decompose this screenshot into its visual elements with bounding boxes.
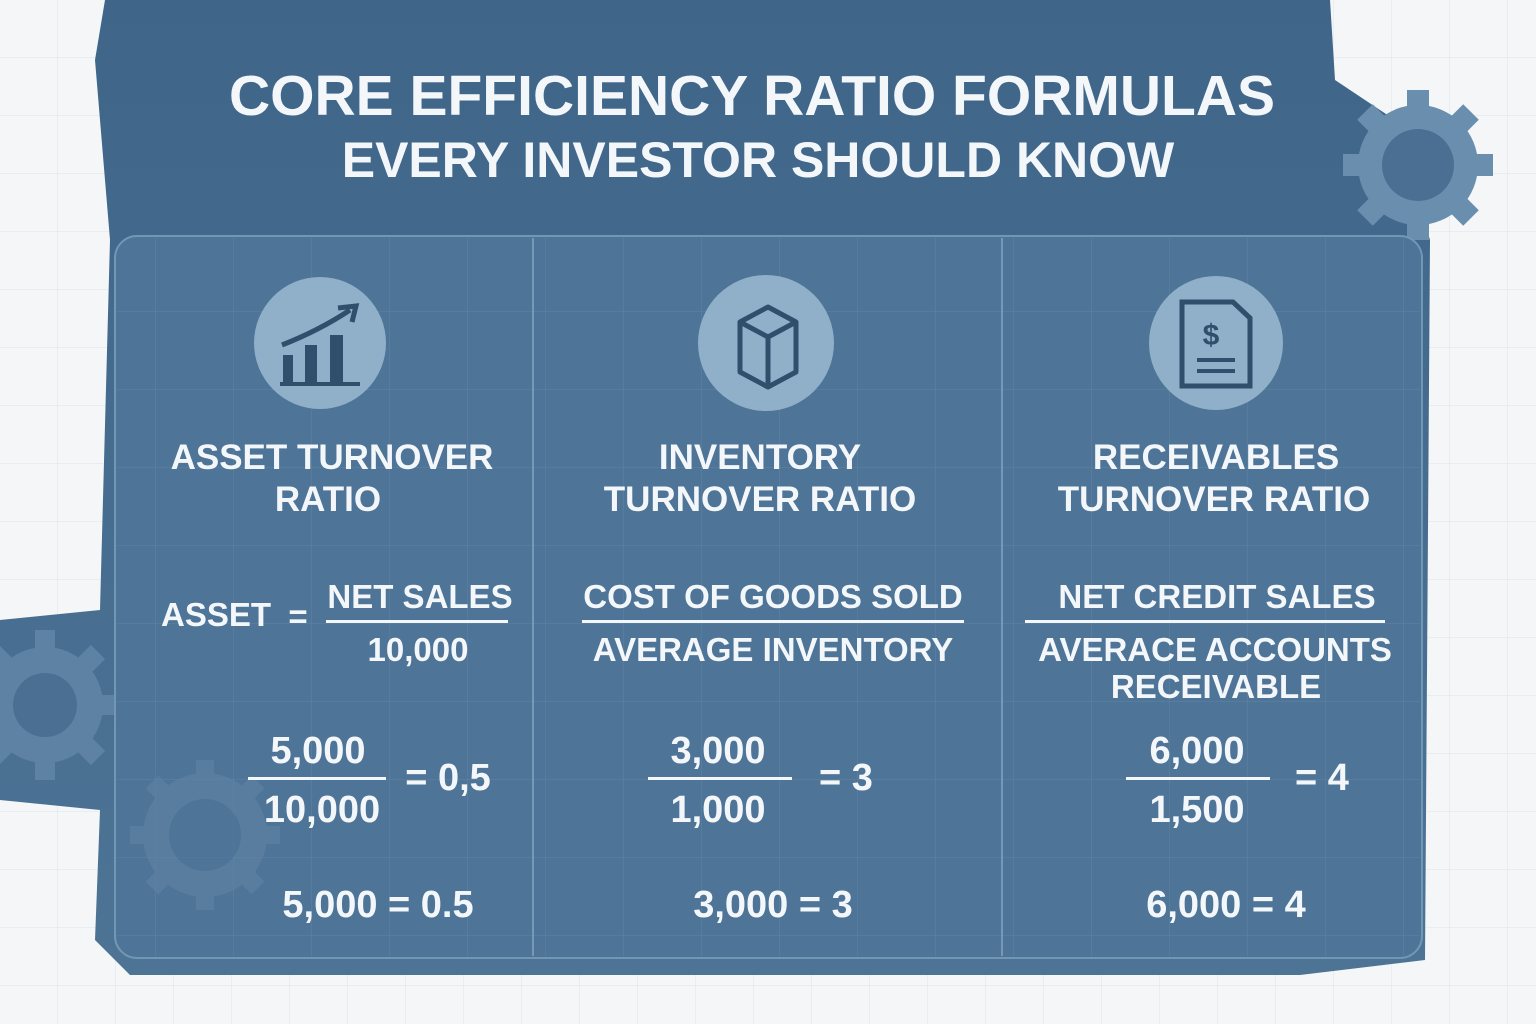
column 3: receivables turnover: AVERACE ACCOUNTS	[1038, 631, 1392, 668]
column 3: receivables turnover	[1025, 276, 1392, 926]
column 2: inventory turnover: AVERAGE INVENTORY	[593, 631, 953, 668]
column 2: inventory turnover: = 3	[819, 757, 873, 799]
column 3: receivables turnover: = 4	[1295, 757, 1349, 799]
title: CORE EFFICIENCY RATIO FORMULAS	[229, 64, 1275, 128]
column 1: asset turnover: ASSET	[161, 596, 271, 633]
column 2: inventory turnover: 1,000	[670, 789, 766, 831]
column 2: inventory turnover: 3,000 = 3	[693, 884, 853, 926]
column 1: asset turnover: 5,000 = 0.5	[282, 884, 474, 926]
column 3: receivables turnover: RECEIVABLES	[1093, 438, 1339, 477]
column 1: asset turnover: 10,000	[264, 789, 380, 831]
column 1: asset turnover: RATIO	[275, 480, 381, 519]
column 2: inventory turnover	[582, 275, 964, 926]
title	[229, 64, 1275, 188]
column 1: asset turnover: = 0,5	[405, 757, 491, 799]
icon: bar chart with arrow	[254, 277, 386, 409]
column 1: asset turnover: =	[288, 598, 308, 635]
column 1: asset turnover: NET SALES	[327, 578, 513, 615]
column 2: inventory turnover: COST OF GOODS SOLD	[583, 578, 963, 615]
column 1: asset turnover: 5,000	[270, 730, 366, 772]
column 3: receivables turnover: TURNOVER RATIO	[1058, 480, 1370, 519]
icon: faint gear in panel	[130, 760, 280, 910]
column 3: receivables turnover: 6,000	[1149, 730, 1245, 772]
icon: invoice document	[1149, 276, 1283, 410]
title: EVERY INVESTOR SHOULD KNOW	[342, 132, 1175, 188]
column 1: asset turnover: 10,000	[368, 631, 468, 668]
icon: gear left	[0, 630, 120, 780]
panel	[115, 236, 1422, 958]
column 3: receivables turnover: 6,000 = 4	[1146, 884, 1306, 926]
column 1: asset turnover	[161, 277, 513, 926]
column 1: asset turnover: ASSET TURNOVER	[171, 438, 493, 477]
icon: gear top right	[1343, 90, 1493, 240]
column 3: receivables turnover: NET CREDIT SALES	[1058, 578, 1376, 615]
column 2: inventory turnover: 3,000	[670, 730, 766, 772]
column 3: receivables turnover: 1,500	[1149, 789, 1245, 831]
column 2: inventory turnover: TURNOVER RATIO	[604, 480, 916, 519]
column 2: inventory turnover: INVENTORY	[659, 438, 861, 477]
column 3: receivables turnover: RECEIVABLE	[1111, 668, 1321, 705]
icon: box	[698, 275, 834, 411]
icon: invoice document: $	[1203, 319, 1220, 352]
